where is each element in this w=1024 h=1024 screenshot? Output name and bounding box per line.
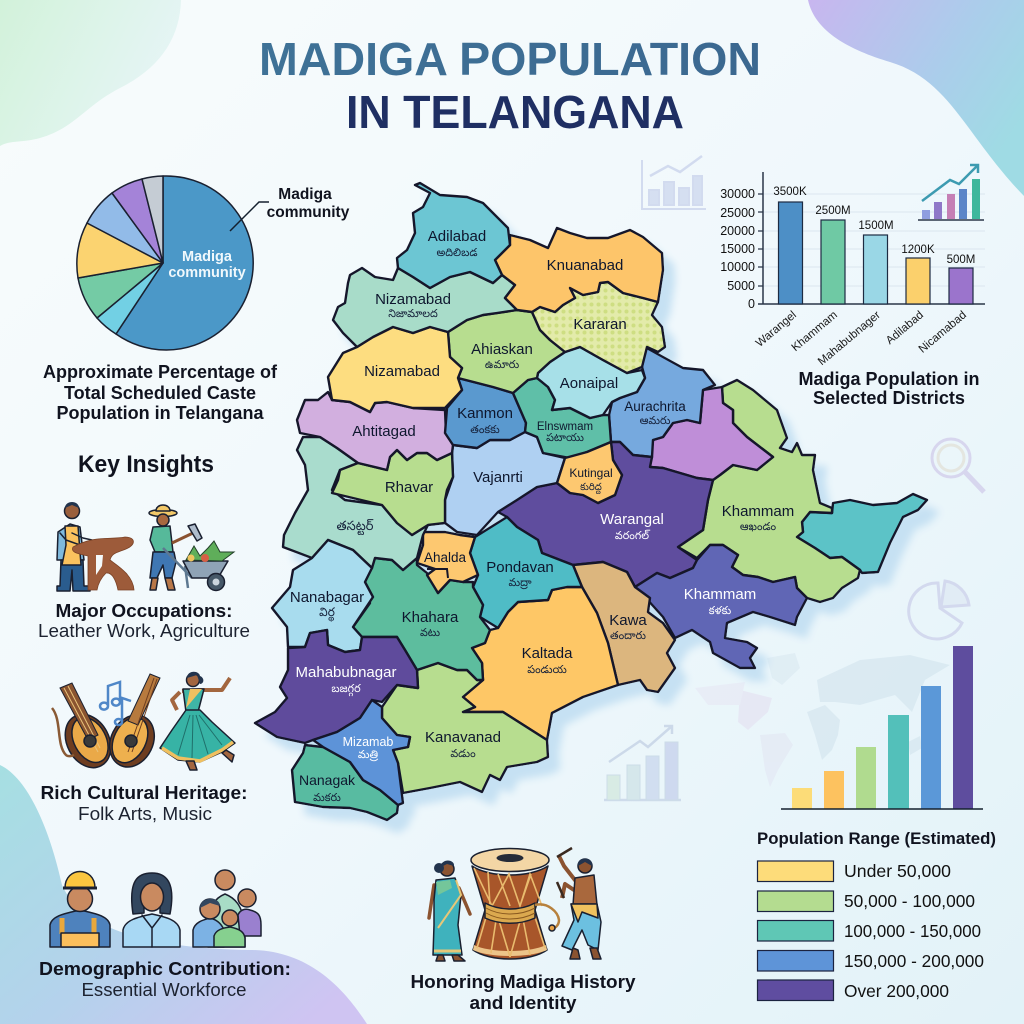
- district: Vajanrti: Vajanrti: [473, 469, 523, 486]
- district: Warangal: వరంగల్: [615, 529, 650, 542]
- pie chart: share of Scheduled Caste population: community: [267, 204, 350, 221]
- district: Khammam green: [678, 380, 860, 602]
- district: Aonaipal: Aonaipal: [560, 375, 618, 392]
- district: Adilabad: Adilabad: [428, 228, 486, 245]
- legend: population range: 50,000 - 100,000: [844, 891, 975, 911]
- faint chart icon top: [642, 156, 706, 209]
- icon: dancer: [160, 672, 235, 770]
- district: Khammam blue: [635, 545, 807, 668]
- map of Telangana districts: [255, 183, 927, 820]
- district: Knuanabad: [495, 228, 663, 312]
- district: Nanabagar: Nanabagar: [290, 589, 364, 606]
- pie chart: share of Scheduled Caste population: Madiga: [278, 186, 332, 203]
- bar chart caption: Selected Districts: [813, 388, 965, 408]
- icon: woman worker: [123, 873, 180, 947]
- district: Adilabad: [397, 183, 510, 288]
- pie chart: share of Scheduled Caste population: [77, 176, 350, 350]
- bar chart: selected districts: [720, 165, 985, 368]
- faint world map: [695, 653, 950, 787]
- district: Khammam green: Khammam: [722, 503, 794, 520]
- district: lilac east: [650, 387, 773, 480]
- bar chart: selected districts: 500M: [947, 254, 975, 266]
- district: Mahabubnagar: Mahabubnagar: [296, 664, 396, 681]
- icon: string instruments and music notes: [52, 674, 163, 776]
- pie chart: share of Scheduled Caste population: community: [168, 265, 246, 281]
- district: Warangal: [498, 442, 713, 587]
- faint magnifier icon: [932, 439, 984, 492]
- mini growth chart inset: [918, 165, 984, 220]
- icon: farmer with wheelbarrow: [149, 505, 234, 590]
- district: Kawa: Kawa: [609, 612, 647, 629]
- pie chart caption: [43, 362, 278, 423]
- text: cultural heritage: Rich Cultural Heritage:: [40, 783, 248, 803]
- district: Ahiaskan: [448, 310, 565, 393]
- district: Kaltada: [463, 587, 618, 740]
- district: Khahara: వటు: [420, 627, 440, 639]
- icon: community group: [193, 870, 261, 947]
- district: Nizamabad mint: [333, 268, 517, 347]
- legend: population range: Population Range (Estimated): [757, 829, 996, 848]
- district: Nizamabad mint: నిజామాలద: [388, 308, 438, 320]
- district: Ahiaskan: ఉమారు: [485, 359, 519, 371]
- district: Nanagak: Nanagak: [299, 772, 356, 788]
- district: Ahtitagad: Ahtitagad: [352, 423, 416, 440]
- pie chart caption: Total Scheduled Caste: [64, 383, 256, 403]
- bar chart: selected districts: Warangel: [754, 309, 799, 350]
- district: Aurachrita: [609, 347, 715, 457]
- bar chart: selected districts: 2500M: [815, 205, 851, 217]
- district: Kanavanad: [382, 663, 548, 793]
- district: Kararan: Kararan: [573, 316, 627, 333]
- legend: population range: [757, 829, 996, 1001]
- pie chart caption: Population in Telangana: [56, 403, 264, 423]
- district: Kanavanad: Kanavanad: [425, 729, 501, 746]
- district: left teal: [283, 437, 428, 570]
- text: demographic contribution: [39, 959, 291, 1000]
- district: Ahalda: Ahalda: [424, 550, 467, 565]
- district: Kanavanad: వడుం: [450, 748, 476, 760]
- district: Kaltada: Kaltada: [522, 645, 573, 662]
- text: demographic contribution: Demographic Contribution:: [39, 959, 291, 979]
- district: Mizamab: మత్రి: [358, 749, 379, 762]
- district: Pondavan: Pondavan: [486, 559, 554, 576]
- district: Ahalda: [417, 532, 478, 593]
- district: Nanagak: మకరు: [313, 792, 341, 804]
- district: Mahabubnagar: బజగ్గర: [331, 683, 361, 697]
- district: Rhavar: Rhavar: [385, 479, 433, 496]
- text: demographic contribution: Essential Workforce: [82, 980, 246, 1000]
- text: honoring history: Honoring Madiga History: [410, 972, 636, 992]
- district: Mizamab: [313, 700, 410, 805]
- district: Kutingal: కురిద్ద: [580, 482, 602, 494]
- district: Kararan: [532, 282, 665, 373]
- district: Khammam blue: కళకు: [709, 605, 731, 617]
- icon: woman in sari: [429, 860, 470, 961]
- district: Mahabubnagar: [255, 630, 418, 743]
- district: Ahiaskan: Ahiaskan: [471, 341, 533, 358]
- district: far east teal: [797, 494, 927, 573]
- text: major occupations: Leather Work, Agriculture: [38, 621, 250, 641]
- bar chart: selected districts: 3500K: [773, 186, 807, 198]
- bar chart: selected districts: 1200K: [901, 244, 935, 256]
- text: honoring history: and Identity: [470, 993, 576, 1013]
- bar chart: selected districts: 0: [748, 297, 755, 311]
- faint growth chart icon: [604, 726, 681, 800]
- legend: population range: Over 200,000: [844, 981, 949, 1001]
- district: Khahara: [353, 558, 490, 680]
- bar chart: selected districts: 5000: [727, 279, 755, 293]
- bar chart: selected districts: 20000: [720, 224, 755, 238]
- district: Aurachrita: Aurachrita: [624, 399, 686, 414]
- text: cultural heritage: [40, 783, 248, 824]
- district: Nanabagar: విర్థ: [319, 605, 336, 622]
- bar chart: selected districts: Nicamabad: [917, 309, 969, 356]
- district: Nizamabad yellow: [328, 327, 462, 412]
- district: Nizamabad mint: Nizamabad: [375, 291, 451, 308]
- icon: drum: [471, 848, 559, 959]
- district: Aonaipal: [537, 347, 645, 418]
- district: Kutingal: [557, 442, 622, 503]
- district: Khahara: Khahara: [402, 609, 459, 626]
- pie chart: share of Scheduled Caste population: Madiga: [182, 249, 233, 265]
- bar chart: selected districts: 30000: [720, 187, 755, 201]
- title: MADIGA POPULATION: [259, 33, 761, 85]
- district: Knuanabad: Knuanabad: [547, 257, 623, 274]
- bar chart: population range: [781, 646, 983, 809]
- text: cultural heritage: Folk Arts, Music: [78, 804, 212, 824]
- district: Nizamabad yellow: Nizamabad: [364, 363, 440, 380]
- district: Adilabad: అదిలిబడ: [436, 247, 478, 259]
- text: major occupations: Major Occupations:: [56, 601, 232, 621]
- bar chart: selected districts: 25000: [720, 206, 755, 220]
- legend: population range: Under 50,000: [844, 861, 951, 881]
- district: Nanabagar: [272, 540, 373, 652]
- icon: construction worker: [50, 872, 110, 947]
- bar chart: selected districts: Mahabubnager: [816, 309, 883, 368]
- bar chart caption: [798, 369, 980, 408]
- bar chart: selected districts: Khammam: [790, 309, 840, 354]
- district: Aurachrita: ఆమరు: [640, 415, 671, 427]
- icon: leather worker: [57, 502, 134, 591]
- district: Kanmon: తంకకు: [470, 424, 500, 436]
- district: Kanmon: Kanmon: [457, 405, 513, 422]
- district: Warangal: Warangal: [600, 511, 664, 528]
- pie chart caption: Approximate Percentage of: [43, 362, 278, 382]
- bar chart: selected districts: 15000: [720, 242, 755, 256]
- district: Kaltada: పండుయ: [527, 664, 567, 676]
- district: Kanmon: [445, 378, 526, 448]
- district: Nanagak: [292, 745, 398, 820]
- district: Rhavar: [332, 450, 453, 535]
- legend: population range: 150,000 - 200,000: [844, 951, 984, 971]
- icon: male drummer: [557, 848, 601, 959]
- district: Kutingal: Kutingal: [569, 466, 613, 480]
- district: Elnswmam: [513, 378, 611, 458]
- bar chart: selected districts: Adilabad: [884, 309, 926, 347]
- title: [259, 33, 761, 138]
- district: Mizamab: Mizamab: [343, 735, 393, 749]
- faint pie icon: [909, 581, 969, 639]
- bar chart: selected districts: 10000: [720, 260, 755, 274]
- district: Elnswmam: పటాయు: [546, 432, 584, 444]
- legend: population range: 100,000 - 150,000: [844, 921, 981, 941]
- district: Khammam green: ఆఖండం: [740, 521, 777, 533]
- district: Khammam blue: Khammam: [684, 586, 756, 603]
- text: major occupations: [38, 601, 250, 641]
- district: Kawa: [573, 562, 675, 692]
- district: left teal: తసట్టర్: [336, 518, 374, 536]
- district: Pondavan: మద్రా: [508, 577, 532, 590]
- heading: key insights: Key Insights: [78, 451, 214, 478]
- district: Kawa: తందారు: [610, 630, 646, 642]
- bar chart caption: Madiga Population in: [798, 369, 980, 389]
- district: Elnswmam: Elnswmam: [537, 421, 593, 433]
- district: Vajanrti: [445, 432, 565, 535]
- bar chart: selected districts: 1500M: [858, 220, 894, 232]
- district: Ahtitagad: [297, 392, 453, 470]
- title: IN TELANGANA: [346, 86, 684, 138]
- text: honoring history: [410, 972, 636, 1013]
- district: Pondavan: [470, 517, 582, 628]
